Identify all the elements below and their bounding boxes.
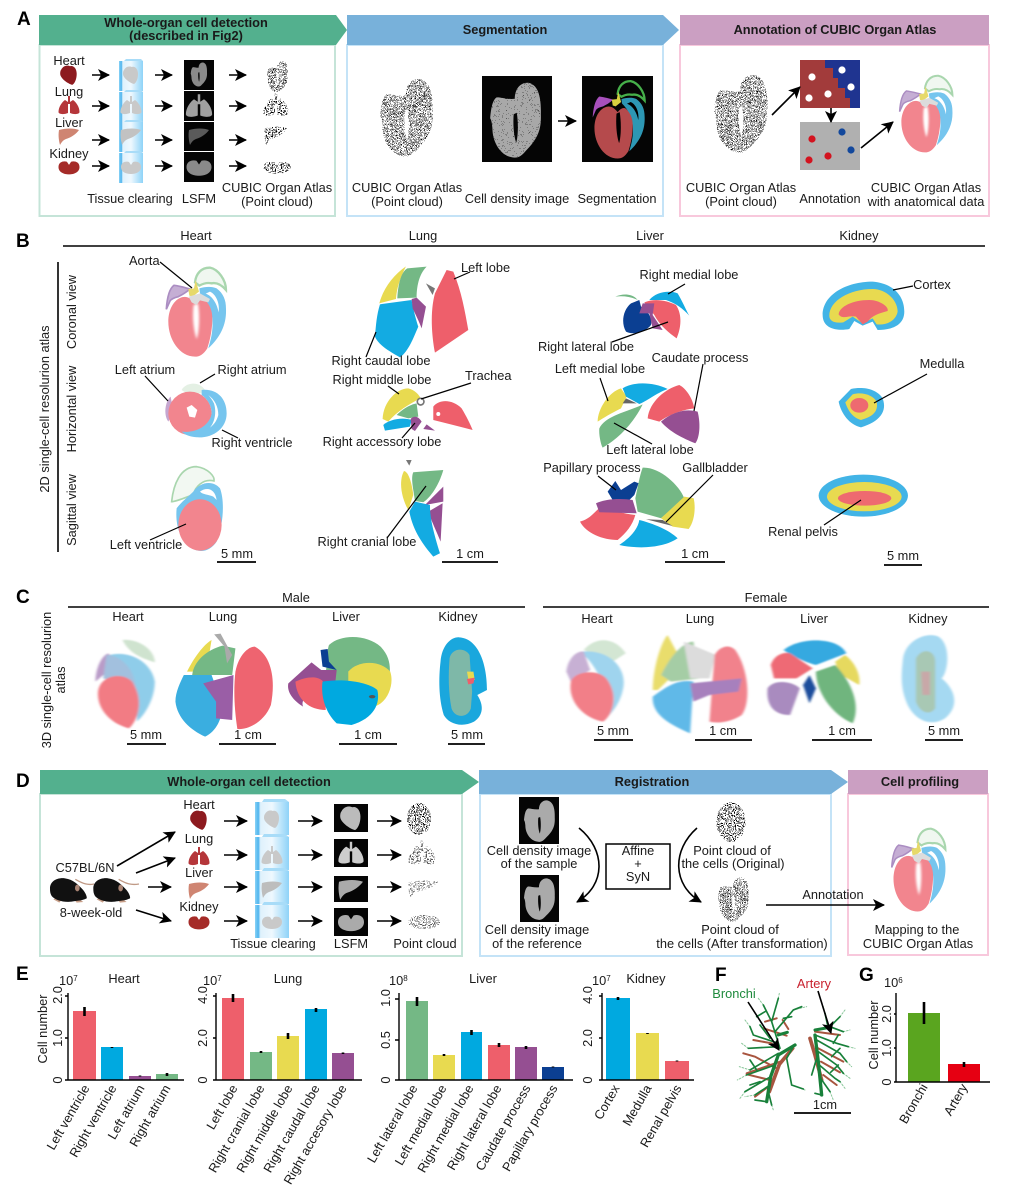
bar chart: liver: Right lateral lobe (444, 1082, 505, 1173)
bar chart: heart: Right ventricle (66, 1082, 120, 1160)
box (40, 45, 335, 216)
segmentation image (582, 76, 653, 162)
header arrow: Registration (615, 774, 690, 789)
captions (230, 936, 457, 951)
scale bar: 1 cm: 1 cm (681, 546, 709, 561)
arrows column 2 (155, 75, 172, 166)
panel B: row headers (37, 262, 79, 552)
lung labels and leaders: Right middle lobe (333, 372, 431, 387)
male heart 3D (95, 640, 155, 728)
arrows column 1 (224, 821, 247, 921)
annotation arrow (766, 887, 884, 905)
bar chart: bronchi vs artery (866, 975, 990, 1126)
panel B: kidney sections (768, 277, 965, 565)
arrow (558, 120, 576, 122)
mouse labels: C57BL/6N (55, 860, 115, 875)
original point cloud (716, 802, 746, 842)
bar chart: heart: 7 (73, 974, 78, 983)
liver labels and leaders: Gallbladder (682, 460, 748, 475)
bar chart: lung (195, 971, 362, 1187)
panel F: bronchi and artery tree (737, 993, 855, 1110)
bar chart: lung: 4.0 (195, 986, 210, 1004)
panel B: column headers (63, 228, 985, 246)
bar chart: lung: Right middle lobe (233, 1082, 296, 1175)
panel E: label: E (16, 964, 29, 985)
bar chart: bronchi vs artery: 1.0 (879, 1039, 894, 1057)
box (848, 794, 988, 955)
panel C: row title: 3D single-cell resolurion (39, 612, 54, 748)
bar chart: kidney: Kidney (626, 971, 666, 986)
organ icons and names: Heart (53, 53, 85, 68)
organ icons and names: Kidney (179, 899, 219, 914)
annotated points (800, 122, 860, 170)
header arrow: Segmentation (463, 22, 547, 37)
lung labels and leaders: Trachea (465, 368, 512, 383)
male liver 3D (288, 637, 392, 725)
lung coronal (375, 266, 468, 357)
caption: CUBIC Organ Atlas (863, 936, 973, 951)
captions: CUBIC Organ Atlas (871, 180, 981, 195)
scale bar: 1 cm (442, 546, 498, 562)
annotation arrow: Annotation (802, 887, 864, 902)
transform box (606, 843, 670, 889)
bar chart: heart: 2.0 (50, 986, 65, 1004)
organ icons and names (179, 797, 219, 929)
arrows (772, 87, 893, 148)
captions (686, 180, 985, 209)
curved arrow: original to transformed (679, 828, 701, 902)
panel D: label: D (16, 771, 30, 792)
liver labels and leaders: Right lateral lobe (538, 339, 634, 354)
lung labels and leaders: Right caudal lobe (332, 353, 430, 368)
male scale bars (127, 727, 485, 744)
point cloud captions (656, 843, 828, 951)
bar chart: kidney: Cortex (591, 1081, 623, 1122)
arrows column 3 (229, 75, 246, 166)
transform box: Affine (622, 843, 654, 858)
bar chart: kidney: 0 (580, 1076, 595, 1084)
cell density image (482, 76, 552, 162)
panel B: row headers: Coronal view (64, 274, 79, 349)
bar chart: lung: Left lobe (203, 1082, 241, 1132)
panel D: cell profiling (848, 770, 988, 955)
header: Annotation of CUBIC Organ Atlas (734, 22, 936, 37)
icon: mice (50, 878, 139, 903)
icon: tissue clearing cube stack (119, 59, 143, 183)
reference density image (520, 875, 559, 922)
captions: Annotation (799, 191, 861, 206)
panel B: heart sections (110, 253, 293, 562)
density image captions: Cell density image (485, 922, 589, 937)
male scale bars: 5 mm (130, 727, 162, 742)
panel A: label: A (17, 9, 31, 30)
arrows column 3 (377, 821, 401, 921)
heart labels and leaders: Left ventricle (110, 537, 182, 552)
captions: CUBIC Organ Atlas (686, 180, 796, 195)
artery tree (743, 1018, 843, 1097)
lung labels and leaders: Left lobe (461, 260, 510, 275)
female header: Female (745, 590, 787, 605)
bar chart: bronchi vs artery: Bronchi (896, 1081, 931, 1126)
scale bar: 1 cm: 1 cm (456, 546, 484, 561)
header arrow (479, 770, 848, 794)
bar chart: liver: Caudate process (472, 1082, 534, 1173)
scale bar: 5 mm: 5 mm (887, 548, 919, 563)
organ point clouds (263, 61, 290, 174)
mapped heart (892, 829, 945, 911)
lung labels and leaders: Right cranial lobe (318, 534, 416, 549)
artery label and arrow: Artery (797, 976, 832, 991)
panel A: annotation (680, 15, 989, 216)
captions: CUBIC Organ Atlas (222, 180, 332, 195)
captions: Tissue clearing (230, 936, 316, 951)
bar chart: heart: Left ventricle (43, 1082, 93, 1152)
bar chart: bronchi vs artery: 2.0 (879, 1005, 894, 1023)
transformed point cloud (718, 877, 749, 922)
point cloud captions: the cells (Original) (681, 856, 785, 871)
organ icons and names: Kidney (49, 146, 89, 161)
organ icons and names: Liver (55, 115, 84, 130)
lung sagittal (401, 460, 443, 557)
bar chart: heart: 1.0 (50, 1029, 65, 1047)
panel F: label: F (715, 965, 727, 986)
header arrow: Whole-organ cell detection (167, 774, 331, 789)
panel C: female atlas (543, 590, 989, 740)
bar chart: kidney: 4.0 (580, 986, 595, 1004)
liver labels and leaders: Left medial lobe (555, 361, 645, 376)
bar chart: liver: 0.5 (378, 1031, 393, 1049)
captions: Cell density image (465, 191, 569, 206)
panel C: row title (39, 612, 68, 748)
panel D: registration (479, 770, 848, 956)
header (680, 15, 989, 45)
female heart 3D (566, 640, 626, 722)
captions (352, 180, 656, 209)
captions: (Point cloud) (371, 194, 443, 209)
panel D: whole-organ cell detection (40, 770, 479, 956)
header arrow: (described in Fig2) (129, 28, 243, 43)
kidney labels and leaders: Renal pelvis (768, 524, 838, 539)
lung horizontal (383, 388, 473, 431)
organ icons and names: Liver (185, 865, 214, 880)
female liver 3D (767, 640, 859, 723)
header arrow (347, 15, 679, 45)
panel B: column headers: Heart (180, 228, 212, 243)
header arrow (39, 15, 347, 45)
bar chart: liver: Left lateral lobe (364, 1082, 421, 1165)
kidney sections stack (819, 282, 908, 517)
bar chart: kidney: 7 (606, 974, 611, 983)
lung labels and leaders: Right accessory lobe (323, 434, 441, 449)
captions: Segmentation (578, 191, 656, 206)
liver horizontal (598, 383, 699, 448)
captions: (Point cloud) (705, 194, 777, 209)
point cloud heart (380, 79, 433, 157)
arrows column 2 (298, 821, 322, 921)
bar chart: heart: Cell number (35, 994, 50, 1064)
bar chart: lung: Right caudal lobe (260, 1082, 323, 1175)
liver labels and leaders: Papillary process (543, 460, 641, 475)
liver sagittal (580, 468, 695, 547)
female lung 3D (653, 635, 747, 733)
female header: Liver (800, 611, 829, 626)
point cloud captions: Point cloud of (701, 922, 779, 937)
male header (68, 590, 525, 624)
header arrow: Whole-organ cell detection (104, 15, 268, 30)
bar chart: liver: 10 (389, 973, 403, 988)
header (848, 770, 988, 794)
panel C: label: C (16, 587, 30, 608)
captions: Point cloud (393, 936, 457, 951)
scale bar: 1cm (794, 1097, 851, 1113)
female header: Heart (581, 611, 613, 626)
bar chart: bronchi vs artery: Artery (941, 1080, 971, 1118)
organ point clouds (407, 803, 440, 929)
fine distal twigs (737, 993, 855, 1110)
panel C: male atlas (68, 590, 525, 744)
bar chart: lung: 10 (203, 973, 217, 988)
male lung 3D (175, 634, 273, 737)
male header: Heart (112, 609, 144, 624)
heart labels and leaders: Right ventricle (211, 435, 293, 450)
box (680, 45, 989, 216)
mouse labels: 8-week-old (60, 905, 122, 920)
bar chart: heart: Left atrium (104, 1082, 148, 1142)
bronchi tree (745, 998, 848, 1105)
female scale bars: 5 mm (597, 723, 629, 738)
panel C: row title: atlas (53, 666, 68, 694)
bar chart: liver: 1.0 (378, 989, 393, 1007)
box (480, 794, 831, 956)
segmented grid with cells (800, 60, 860, 108)
liver coronal (615, 292, 689, 338)
bar chart: heart: Heart (108, 971, 140, 986)
bar chart: lung: 0 (195, 1076, 210, 1084)
kidney labels and leaders: Medulla (920, 356, 965, 371)
bronchi label and arrow: Bronchi (712, 986, 756, 1001)
bar chart: lung: Right cranial lobe (205, 1082, 268, 1175)
panel B: column headers: Kidney (839, 228, 879, 243)
density image captions (485, 843, 591, 951)
point cloud heart (714, 75, 767, 153)
caption: Mapping to the (875, 922, 959, 937)
artery label and arrow (797, 976, 832, 1033)
panel G: label: G (859, 965, 874, 986)
bar chart: lung: Lung (274, 971, 302, 986)
bar chart: heart (35, 971, 184, 1160)
captions: LSFM (182, 191, 216, 206)
male scale bars: 1 cm (354, 727, 382, 742)
liver labels and leaders: Left lateral lobe (606, 442, 694, 457)
transform box: + (634, 856, 642, 871)
bar chart: bronchi vs artery: 0 (879, 1078, 894, 1086)
bar chart: liver: 8 (403, 974, 408, 983)
header: Cell profiling (881, 774, 959, 789)
bar chart: kidney (580, 971, 694, 1150)
male scale bars: 1 cm (234, 727, 262, 742)
bronchi label and arrow (712, 986, 779, 1050)
organ icons and names: Heart (183, 797, 215, 812)
panel B: lung sections (318, 260, 512, 562)
arrows from mice to organs (117, 832, 175, 921)
panel A: segmentation (347, 15, 679, 216)
heart labels and leaders: Left atrium (115, 362, 175, 377)
bar chart: liver: Liver (469, 971, 498, 986)
male kidney 3D (439, 637, 487, 725)
captions: LSFM (334, 936, 368, 951)
LSFM images (334, 804, 368, 936)
captions: CUBIC Organ Atlas (352, 180, 462, 195)
female scale bars (594, 723, 963, 740)
female kidney 3D (902, 635, 954, 722)
scale bar: 1cm: 1cm (813, 1097, 837, 1112)
kidney labels and leaders: Cortex (913, 277, 951, 292)
female scale bars: 1 cm (709, 723, 737, 738)
panel B: liver sections (538, 267, 748, 562)
bar chart: heart: Right atrium (126, 1082, 174, 1149)
heart sagittal (172, 467, 223, 551)
annotated heart (900, 76, 952, 152)
arrows column 1 (92, 75, 109, 166)
female scale bars: 5 mm (928, 723, 960, 738)
bar chart: bronchi vs artery: 10 (884, 975, 898, 990)
point cloud captions: the cells (After transformation) (656, 936, 828, 951)
density image captions: of the reference (492, 936, 582, 951)
box (347, 45, 663, 216)
male header: Kidney (438, 609, 478, 624)
header arrow (40, 770, 479, 794)
bar chart: liver: Right medial lobe (414, 1082, 477, 1175)
organ icons and names: Lung (55, 84, 83, 99)
organ icons and names: Lung (185, 831, 213, 846)
male header: Lung (209, 609, 237, 624)
captions: with anatomical data (867, 194, 985, 209)
density image captions: of the sample (501, 856, 577, 871)
male header: Male (282, 590, 310, 605)
scale bar: 1 cm (665, 546, 725, 562)
point cloud captions: Point cloud of (693, 843, 771, 858)
kidney labels and leaders (768, 277, 965, 539)
organ icons and names (49, 53, 89, 174)
bar chart: liver: Left medial lobe (391, 1082, 450, 1168)
panel B: column headers: Liver (636, 228, 665, 243)
panel B: row headers: Sagittal view (64, 473, 79, 546)
liver labels and leaders (538, 267, 748, 522)
bar chart: heart: 0 (50, 1076, 65, 1084)
captions: (Point cloud) (241, 194, 313, 209)
bar chart: heart: 10 (59, 973, 73, 988)
heart horizontal (165, 384, 227, 437)
heart labels and leaders: Right atrium (218, 362, 286, 377)
female header: Kidney (908, 611, 948, 626)
bar chart: kidney: Renal pelvis (637, 1082, 685, 1150)
bar chart: lung: 2.0 (195, 1029, 210, 1047)
bar chart: bronchi vs artery: 6 (898, 976, 903, 985)
scale bar: 5 mm: 5 mm (221, 546, 253, 561)
female header (543, 590, 989, 626)
male header: Liver (332, 609, 361, 624)
bar chart: lung: Right accesory lobe (280, 1082, 350, 1187)
heart labels and leaders: Aorta (129, 253, 160, 268)
panel B: row headers: Horizontal view (64, 365, 79, 452)
bar chart: liver: Papillary process (499, 1082, 561, 1174)
female scale bars: 1 cm (828, 723, 856, 738)
panel B: row headers: 2D single-cell resolurion atlas (37, 325, 52, 493)
icon: tissue clearing cube stack (255, 799, 289, 938)
liver labels and leaders: Right medial lobe (640, 267, 738, 282)
box (40, 794, 462, 956)
panel B: label: B (16, 231, 30, 252)
mouse labels (55, 860, 122, 920)
lung labels and leaders (318, 260, 512, 549)
bar chart: bronchi vs artery: Cell number (866, 1000, 881, 1070)
caption (863, 922, 973, 951)
LSFM images (184, 60, 214, 182)
captions: Tissue clearing (87, 191, 173, 206)
panel B: column headers: Lung (409, 228, 437, 243)
transform box: SyN (626, 869, 650, 884)
sample density image (519, 797, 559, 844)
male scale bars: 5 mm (451, 727, 483, 742)
bar chart: kidney: 2.0 (580, 1029, 595, 1047)
density image captions: Cell density image (487, 843, 591, 858)
bar chart: liver: 0 (378, 1076, 393, 1084)
female header: Lung (686, 611, 714, 626)
bar chart: kidney: 10 (592, 973, 606, 988)
panel A: whole-organ cell detection (39, 15, 347, 216)
captions (87, 180, 332, 209)
liver labels and leaders: Caudate process (652, 350, 748, 365)
heart coronal (166, 268, 226, 357)
bar chart: liver (364, 971, 573, 1175)
bar chart: kidney: Medulla (619, 1081, 655, 1128)
curved arrow: sample to reference (577, 828, 599, 902)
bar chart: lung: 7 (217, 974, 222, 983)
heart labels and leaders (110, 253, 293, 552)
